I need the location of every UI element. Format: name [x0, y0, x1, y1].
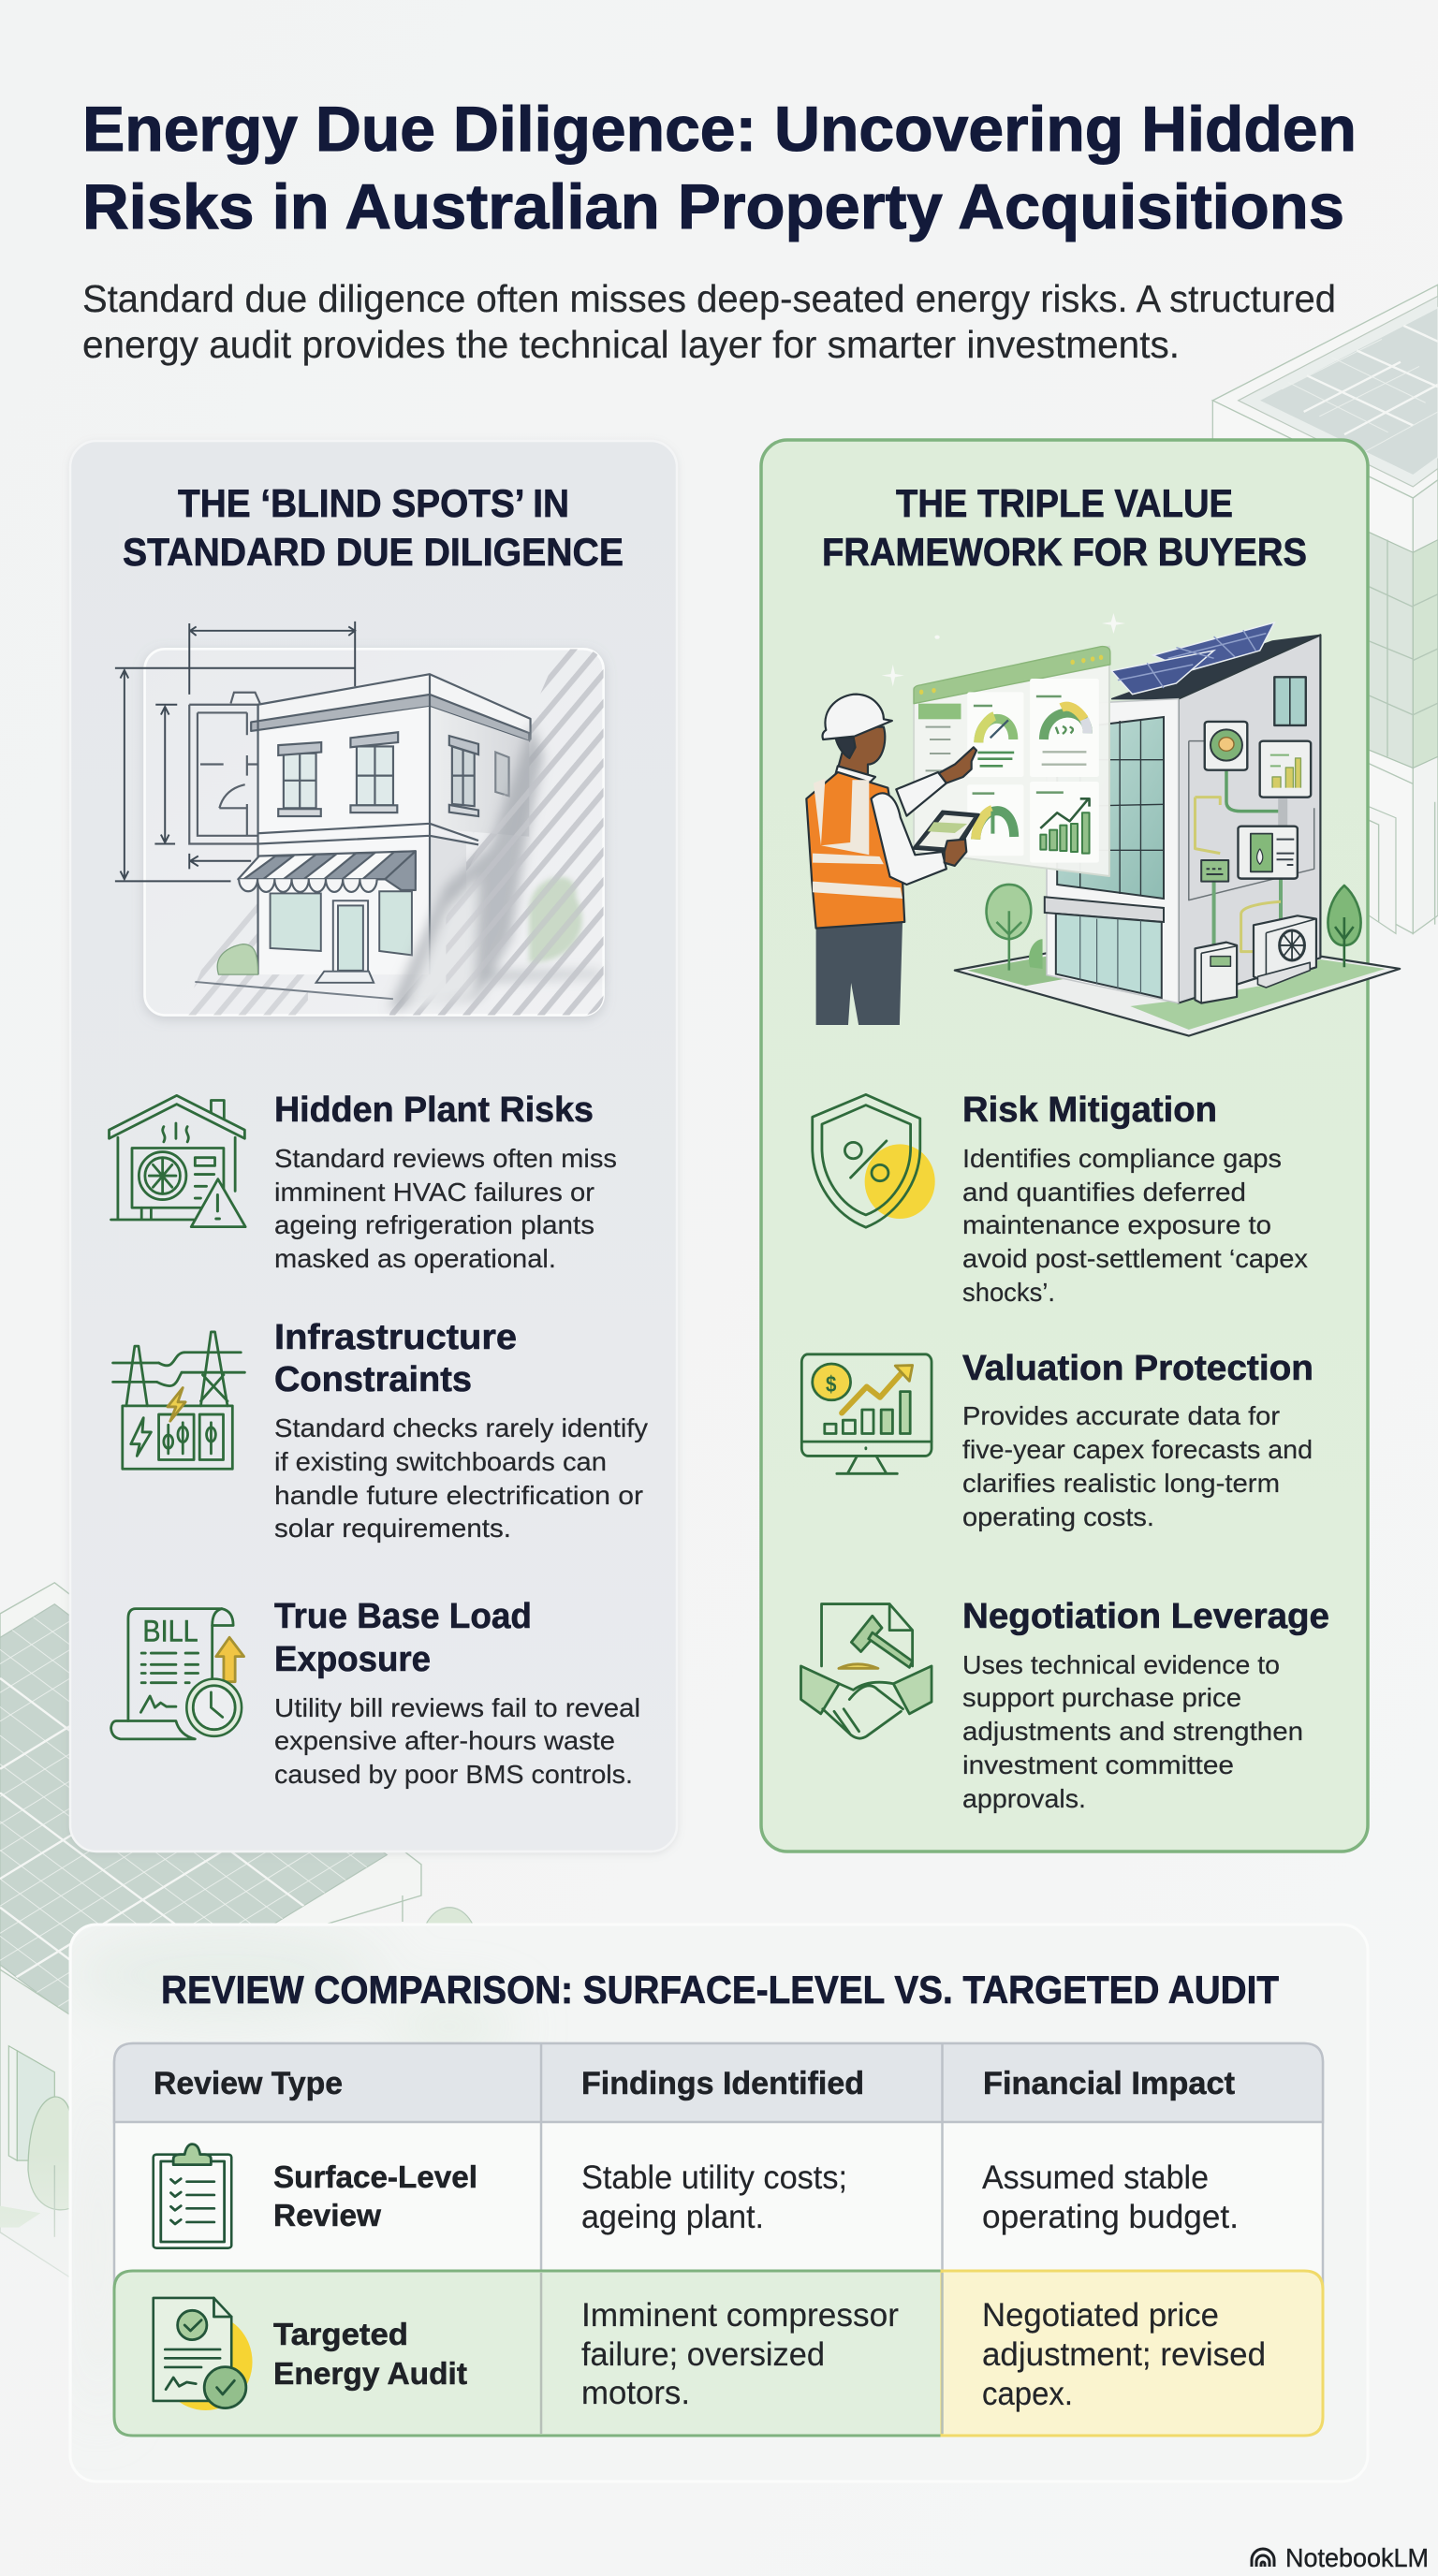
- panel heading: THE ‘BLIND SPOTS’ IN: [178, 481, 569, 525]
- item text: operating costs.: [962, 1502, 1154, 1531]
- icon: monitor with rising chart: [801, 1354, 932, 1473]
- row: targeted energy audit: [114, 2271, 1323, 2436]
- dashboard screen: [914, 647, 1110, 876]
- building side: [1179, 635, 1320, 1003]
- head and neck: [838, 727, 885, 775]
- item text: caused by poor BMS controls.: [274, 1760, 633, 1789]
- subtitle: energy audit provides the technical layer for smarter investments.: [82, 323, 1180, 366]
- subtitle: [82, 277, 1336, 366]
- logo text: NotebookLM: [1285, 2543, 1429, 2572]
- row: targeted energy audit: Energy Audit: [273, 2356, 467, 2391]
- item heading: Valuation Protection: [962, 1349, 1313, 1388]
- hard hat: [823, 695, 892, 739]
- background illustration: lower-left building with solar roof: [0, 1582, 473, 2277]
- title: [82, 94, 1357, 242]
- background illustration: top-right building: [1212, 285, 1438, 933]
- item heading: Hidden Plant Risks: [274, 1090, 594, 1130]
- icon: bill with clock: [111, 1609, 244, 1739]
- table body: [114, 2043, 1323, 2362]
- row: surface-level review: [154, 2144, 1239, 2248]
- floor plan: [189, 693, 260, 844]
- item: risk mitigation: [813, 1090, 1308, 1307]
- item text: [274, 1693, 640, 1789]
- header row: Review Type: [154, 2066, 343, 2101]
- item: valuation protection: [801, 1349, 1313, 1531]
- item heading: True Base Load: [274, 1597, 532, 1636]
- row: surface-level review: operating budget.: [982, 2199, 1239, 2235]
- panel heading: REVIEW COMPARISON: SURFACE-LEVEL VS. TARGETED AUDIT: [161, 1968, 1279, 2012]
- item text: support purchase price: [962, 1683, 1241, 1712]
- blueprint dimension lines: [115, 622, 355, 881]
- item text: five-year capex forecasts and: [962, 1435, 1313, 1464]
- bush: [217, 944, 258, 974]
- panel heading: [822, 481, 1307, 574]
- shirt collar: [836, 766, 875, 783]
- icon: HVAC in house: [110, 1095, 245, 1227]
- item text: Utility bill reviews fail to reveal: [274, 1693, 640, 1722]
- ground: [955, 953, 1400, 1036]
- item: true base load exposure: [111, 1597, 640, 1789]
- title: Risks in Australian Property Acquisitions: [82, 171, 1344, 242]
- sparkles: [882, 613, 1125, 686]
- awning: [238, 851, 416, 892]
- arm and tablet: [872, 793, 946, 885]
- row: surface-level review: Review: [273, 2198, 381, 2232]
- panel background: [70, 441, 677, 1852]
- item text: Identifies compliance gaps: [962, 1144, 1282, 1173]
- solar panels: [1111, 622, 1320, 699]
- item heading: [274, 1597, 532, 1679]
- panel heading: THE TRIPLE VALUE: [896, 481, 1233, 525]
- panel heading: STANDARD DUE DILIGENCE: [123, 530, 624, 574]
- panel: blind spots: [70, 441, 677, 1852]
- illustration: storefront blueprint: [115, 622, 604, 1016]
- trees: [987, 885, 1361, 971]
- row: surface-level review: Surface-Level: [273, 2159, 477, 2194]
- footer: NotebookLM logo: [1252, 2543, 1429, 2572]
- stripes over blur: [446, 776, 603, 998]
- row: targeted energy audit: Imminent compressor: [581, 2297, 899, 2334]
- item text: [274, 1413, 648, 1543]
- row: targeted energy audit: motors.: [581, 2375, 690, 2411]
- title: Energy Due Diligence: Uncovering Hidden: [82, 94, 1357, 165]
- blurred tree: [529, 877, 582, 962]
- row: targeted energy audit: adjustment; revised: [982, 2336, 1266, 2373]
- item text: investment committee: [962, 1750, 1234, 1779]
- item text: Provides accurate data for: [962, 1401, 1280, 1430]
- item heading: Constraints: [274, 1360, 472, 1399]
- panel background: [70, 1925, 1368, 2481]
- item text: maintenance exposure to: [962, 1210, 1271, 1239]
- row: targeted energy audit: Targeted: [273, 2317, 408, 2351]
- panel: review comparison: [66, 1925, 1368, 2481]
- icon: pylons and switchboard: [113, 1332, 244, 1469]
- trousers: [816, 922, 902, 1025]
- subtitle: Standard due diligence often misses deep-seated energy risks. A structured: [82, 277, 1336, 320]
- panel heading: FRAMEWORK FOR BUYERS: [822, 530, 1307, 574]
- row: targeted energy audit: capex.: [982, 2376, 1073, 2412]
- item: infrastructure constraints: [113, 1318, 648, 1543]
- item text: solar requirements.: [274, 1514, 511, 1543]
- item text: [962, 1650, 1303, 1813]
- item text: and quantifies deferred: [962, 1178, 1246, 1207]
- row: surface-level review: ageing plant.: [581, 2199, 764, 2235]
- header row: [114, 2043, 1323, 2122]
- item text: avoid post-settlement ‘capex: [962, 1244, 1308, 1273]
- item: hidden plant risks: [110, 1090, 617, 1273]
- icon: gavel and handshake: [801, 1604, 932, 1738]
- row: surface-level review: Assumed stable: [982, 2159, 1209, 2196]
- item text: Standard reviews often miss: [274, 1144, 617, 1173]
- logo mark: [1252, 2549, 1274, 2567]
- blurred obscured area: [389, 723, 600, 1009]
- item: negotiation leverage: [801, 1597, 1329, 1813]
- icon: monitor with rising chart: $: [826, 1371, 837, 1397]
- row: targeted energy audit: Negotiated price: [982, 2297, 1219, 2334]
- panel heading: [123, 481, 624, 574]
- item text: shocks’.: [962, 1278, 1055, 1307]
- building plant system: [1189, 677, 1316, 1003]
- item text: masked as operational.: [274, 1244, 556, 1273]
- item text: handle future electrification or: [274, 1481, 643, 1510]
- item text: expensive after-hours waste: [274, 1726, 615, 1755]
- row: surface-level review: Stable utility costs;: [581, 2159, 847, 2196]
- item text: if existing switchboards can: [274, 1447, 607, 1476]
- item heading: Risk Mitigation: [962, 1090, 1217, 1130]
- item text: Uses technical evidence to: [962, 1650, 1280, 1679]
- item heading: Exposure: [274, 1640, 431, 1679]
- header row: Findings Identified: [581, 2066, 864, 2101]
- vest: [806, 772, 904, 929]
- panel: triple value framework: [761, 440, 1400, 1852]
- header row: Financial Impact: [983, 2066, 1235, 2101]
- item text: clarifies realistic long-term: [962, 1469, 1280, 1498]
- engineer: [806, 695, 979, 1025]
- icon: bill with clock: BILL: [142, 1615, 198, 1648]
- item text: adjustments and strengthen: [962, 1717, 1303, 1746]
- item text: [962, 1144, 1308, 1307]
- pointing arm: [896, 772, 946, 816]
- fade on lower-left background building: [0, 2153, 71, 2340]
- item text: [962, 1401, 1313, 1531]
- item text: imminent HVAC failures or: [274, 1178, 594, 1207]
- item heading: [274, 1318, 517, 1399]
- illustration: engineer and building dashboard: [806, 613, 1400, 1036]
- blurred tint: [103, 1939, 466, 2037]
- item text: Standard checks rarely identify: [274, 1413, 648, 1442]
- icon: clipboard: [154, 2144, 231, 2248]
- item heading: Infrastructure: [274, 1318, 517, 1357]
- building front: [1047, 699, 1179, 1003]
- icon: shield with percent: [813, 1094, 935, 1227]
- windows: [278, 732, 509, 816]
- item heading: Negotiation Leverage: [962, 1597, 1329, 1636]
- item text: [274, 1144, 617, 1273]
- building: [251, 674, 531, 974]
- panel background: [761, 440, 1368, 1852]
- item text: ageing refrigeration plants: [274, 1210, 594, 1239]
- shopfront and door: [195, 891, 412, 999]
- item text: approvals.: [962, 1784, 1086, 1813]
- comparison table: [114, 2043, 1323, 2436]
- icon: audit document: [154, 2298, 253, 2410]
- row: targeted energy audit: failure; oversized: [581, 2336, 825, 2373]
